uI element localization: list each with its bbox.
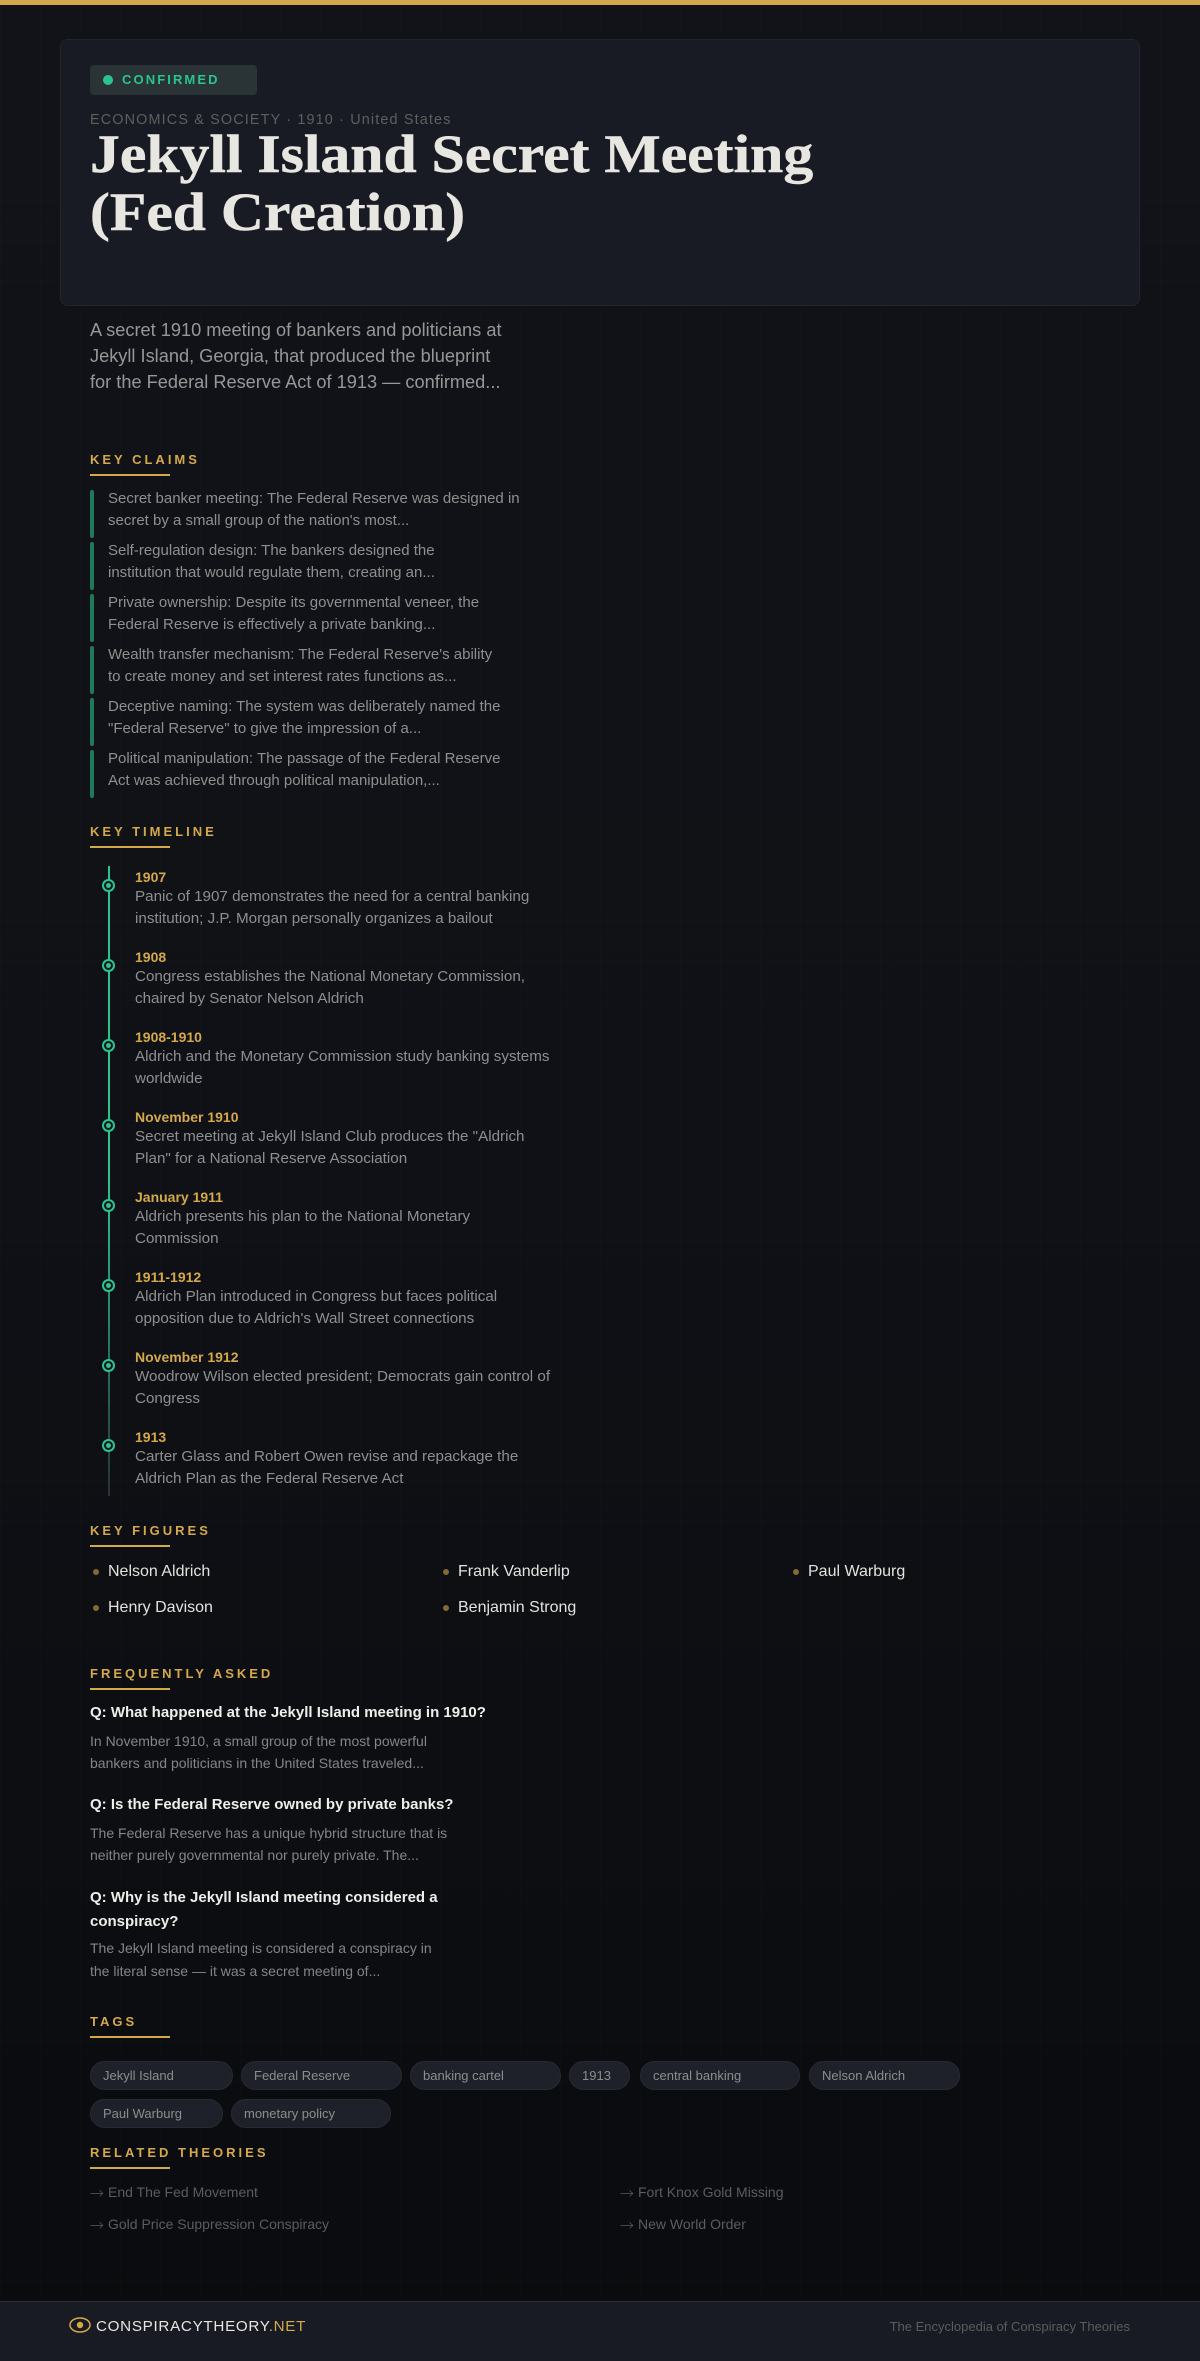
event November 1910: Secret meeting at Jekyll Island Club produces the "Aldrich [135, 1128, 524, 1145]
badge label: CONFIRMED [122, 72, 220, 87]
question 1: Q: What happened at the Jekyll Island meeting in 1910? [90, 1704, 486, 1721]
event 1908: chaired by Senator Nelson Aldrich [135, 990, 364, 1007]
claim 5: Deceptive naming: The system was deliberately named the [108, 698, 500, 715]
event 1911-1912: opposition due to Aldrich's Wall Street connections [135, 1310, 474, 1327]
summary text: for the Federal Reserve Act of 1913 — confirmed... [90, 372, 500, 392]
tag: banking cartel [423, 2068, 504, 2083]
link: New World Order: → [620, 2216, 634, 2236]
claim 4 [90, 646, 492, 694]
link: New World Order: New World Order [638, 2216, 746, 2232]
event 1908-1910 [102, 1029, 549, 1087]
footer brand: CONSPIRACYTHEORY.NET [96, 2318, 306, 2335]
event 1911-1912: 1911-1912 [135, 1269, 201, 1285]
tag: 1913 [582, 2068, 611, 2083]
claim 6: Political manipulation: The passage of the Federal Reserve [108, 750, 500, 767]
event 1913: 1913 [135, 1429, 166, 1445]
question 2: The Federal Reserve has a unique hybrid structure that is [90, 1824, 447, 1840]
link: Fort Knox Gold Missing: → [620, 2184, 634, 2204]
panel: key claims list [90, 490, 520, 798]
summary text [90, 320, 502, 392]
title: (Fed Creation) [90, 182, 465, 242]
panel: key figures [93, 1563, 905, 1616]
claim 2 [90, 542, 435, 590]
event January 1911: Commission [135, 1230, 219, 1247]
tag [241, 2061, 402, 2090]
event 1907: Panic of 1907 demonstrates the need for a central banking [135, 888, 529, 905]
panel: FAQ [90, 1704, 486, 1979]
link: Gold Price Suppression Conspiracy: Gold Price Suppression Conspiracy [108, 2216, 329, 2232]
tag: Paul Warburg [103, 2106, 182, 2121]
heading: key figures: KEY FIGURES [90, 1523, 211, 1538]
link: New World Order [620, 2216, 746, 2236]
title: Jekyll Island Secret Meeting [90, 124, 813, 184]
summary text: Jekyll Island, Georgia, that produced the blueprint [90, 346, 490, 366]
event 1908: Congress establishes the National Monetary Commission, [135, 968, 525, 985]
claim 4: to create money and set interest rates functions as... [108, 668, 457, 685]
claim 3: Private ownership: Despite its governmental veneer, the [108, 594, 479, 611]
figure: Paul Warburg: Paul Warburg [808, 1563, 905, 1580]
event 1913 [102, 1429, 518, 1487]
claim 1: Secret banker meeting: The Federal Reserve was designed in [108, 490, 520, 507]
panel: related theories [90, 2184, 784, 2236]
question 2: neither purely governmental nor purely private. The... [90, 1847, 419, 1863]
figure: Henry Davison: Henry Davison [108, 1599, 213, 1616]
heading: frequently asked: FREQUENTLY ASKED [90, 1666, 273, 1681]
figure: Nelson Aldrich: Nelson Aldrich [108, 1563, 210, 1580]
claim 2: institution that would regulate them, creating an... [108, 564, 435, 581]
heading: tags: TAGS [90, 2014, 137, 2029]
title [90, 124, 813, 242]
claim 1: secret by a small group of the nation's most... [108, 512, 409, 529]
footer [0, 2301, 1200, 2361]
footer tagline: The Encyclopedia of Conspiracy Theories [890, 2319, 1130, 2334]
claim 5 [90, 698, 500, 746]
event 1908-1910: 1908-1910 [135, 1029, 202, 1045]
claim 3 [90, 594, 479, 642]
panel: hero header card [60, 39, 1140, 306]
top accent bar [0, 0, 1200, 5]
question 3: Q: Why is the Jekyll Island meeting considered a [90, 1889, 438, 1906]
link: End The Fed Movement: End The Fed Movement [108, 2184, 258, 2200]
panel: tags [90, 2061, 960, 2128]
event 1907 [102, 869, 529, 927]
event November 1910: Plan" for a National Reserve Association [135, 1150, 407, 1167]
figure: Frank Vanderlip: Frank Vanderlip [458, 1563, 570, 1580]
summary text: A secret 1910 meeting of bankers and politicians at [90, 320, 502, 340]
link: Gold Price Suppression Conspiracy: → [90, 2216, 104, 2236]
question 2: Q: Is the Federal Reserve owned by private banks? [90, 1796, 453, 1813]
tag: Federal Reserve [254, 2068, 350, 2083]
heading: related theories: RELATED THEORIES [90, 2145, 268, 2160]
event January 1911 [102, 1189, 470, 1247]
tag: Nelson Aldrich [822, 2068, 905, 2083]
event November 1912: Congress [135, 1390, 200, 1407]
event 1907: 1907 [135, 869, 166, 885]
event 1907: institution; J.P. Morgan personally organizes a bailout [135, 910, 493, 927]
question 3 [90, 1889, 438, 1979]
link: Fort Knox Gold Missing: Fort Knox Gold Missing [638, 2184, 784, 2200]
link: End The Fed Movement: → [90, 2184, 104, 2204]
event 1913: Aldrich Plan as the Federal Reserve Act [135, 1470, 403, 1487]
claim 5: "Federal Reserve" to give the impression of a... [108, 720, 421, 737]
question 3: The Jekyll Island meeting is considered a conspiracy in [90, 1940, 432, 1956]
tag [640, 2061, 800, 2090]
claim 2: Self-regulation design: The bankers designed the [108, 542, 435, 559]
event January 1911: Aldrich presents his plan to the National Monetary [135, 1208, 470, 1225]
tag [410, 2061, 561, 2090]
claim 1 [90, 490, 520, 538]
icon: eye logo [69, 2316, 91, 2334]
question 1: bankers and politicians in the United States traveled... [90, 1755, 424, 1771]
panel: timeline [102, 866, 550, 1496]
event 1911-1912: Aldrich Plan introduced in Congress but faces political [135, 1288, 497, 1305]
question 1: In November 1910, a small group of the most powerful [90, 1732, 427, 1748]
event November 1912: November 1912 [135, 1349, 239, 1365]
status badge: confirmed [90, 65, 257, 95]
heading: key timeline: KEY TIMELINE [90, 824, 217, 839]
event 1908: 1908 [135, 949, 166, 965]
claim 4: Wealth transfer mechanism: The Federal Reserve's ability [108, 646, 492, 663]
heading: key claims: KEY CLAIMS [90, 452, 200, 467]
event 1908-1910: Aldrich and the Monetary Commission study banking systems [135, 1048, 549, 1065]
event 1913: Carter Glass and Robert Owen revise and repackage the [135, 1448, 518, 1465]
event November 1912: Woodrow Wilson elected president; Democrats gain control of [135, 1368, 550, 1385]
tag [569, 2061, 630, 2090]
claim 3: Federal Reserve is effectively a private banking... [108, 616, 435, 633]
question 1 [90, 1704, 486, 1771]
event November 1910: November 1910 [135, 1109, 239, 1125]
tag [231, 2099, 391, 2128]
event November 1912 [102, 1349, 550, 1407]
tag: monetary policy [244, 2106, 335, 2121]
question 2 [90, 1796, 453, 1863]
figure: Benjamin Strong: Benjamin Strong [458, 1599, 576, 1616]
event 1911-1912 [102, 1269, 497, 1327]
timeline spine [108, 866, 110, 1496]
event 1908 [102, 949, 525, 1007]
claim 6 [90, 750, 500, 798]
tag: Jekyll Island [103, 2068, 174, 2083]
claim 6: Act was achieved through political manipulation,... [108, 772, 440, 789]
event November 1910 [102, 1109, 524, 1167]
tag [809, 2061, 960, 2090]
tag [90, 2061, 233, 2090]
question 3: the literal sense — it was a secret meeting of... [90, 1962, 380, 1978]
category and date line: ECONOMICS & SOCIETY · 1910 · United States [90, 112, 452, 128]
event 1908-1910: worldwide [135, 1070, 203, 1087]
tag [90, 2099, 223, 2128]
tag: central banking [653, 2068, 741, 2083]
event January 1911: January 1911 [135, 1189, 223, 1205]
question 3: conspiracy? [90, 1913, 178, 1930]
icon: status dot [103, 75, 113, 85]
